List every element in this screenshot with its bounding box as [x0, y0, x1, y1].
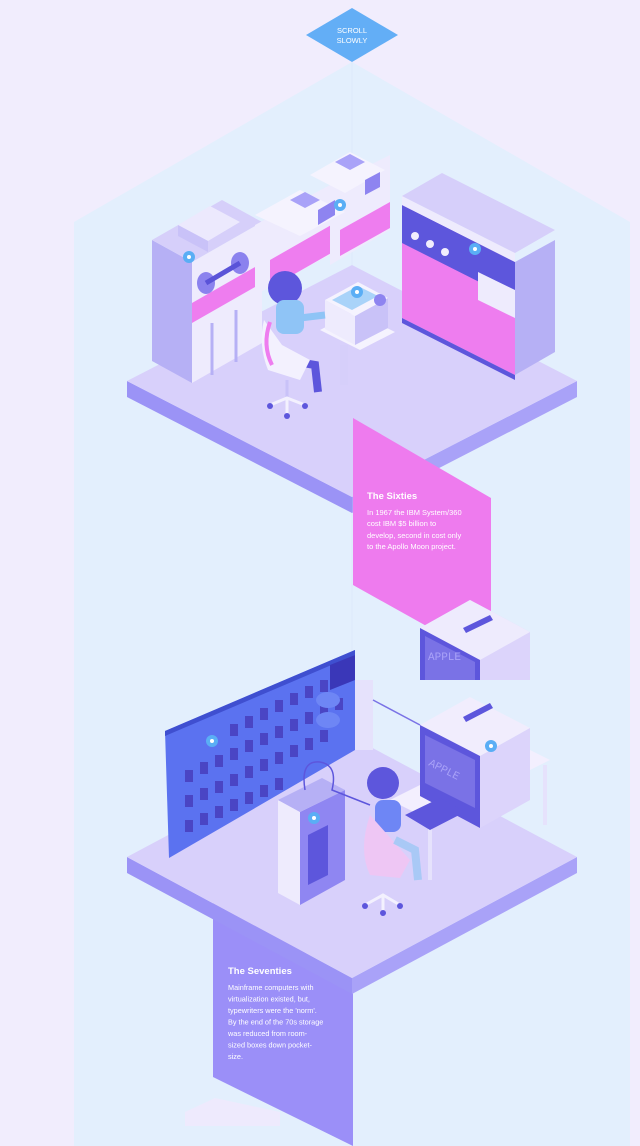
callout: the sixties	[353, 418, 491, 628]
callout: the sixties: to the Apollo Moon project.	[367, 542, 456, 551]
cabinet: tape reel left	[152, 200, 262, 383]
apple computer fragment	[420, 600, 530, 680]
person + chair	[262, 271, 325, 419]
callout: the seventies: By the end of the 70s storage	[228, 1018, 323, 1026]
floor: seventies	[127, 737, 577, 994]
next floor fragment	[185, 1098, 280, 1126]
scroll slowly badge: SCROLL	[337, 26, 367, 35]
cabinets: printers back	[255, 152, 390, 295]
cabinet: right big	[402, 173, 555, 380]
apple computer + desk: APPLE	[426, 758, 461, 784]
walkman	[278, 762, 370, 905]
callout: the seventies: size.	[228, 1052, 243, 1061]
callout: the seventies: typewriters were the 'norm'.	[228, 1006, 317, 1015]
callout: the seventies	[213, 900, 353, 1146]
callout: the sixties: cost IBM $5 billion to	[367, 519, 436, 528]
callout: the seventies: Mainframe computers with	[228, 983, 314, 992]
floor: sixties	[127, 265, 577, 513]
scene: sixties machines	[152, 152, 555, 419]
callout: the seventies: The Seventies	[228, 966, 292, 977]
circuit board	[165, 650, 420, 858]
callout: the seventies: was reduced from room-	[227, 1029, 308, 1038]
markers	[183, 199, 497, 824]
scroll slowly badge: SLOWLY	[337, 36, 367, 45]
callout: the sixties: In 1967 the IBM System/360	[367, 508, 462, 517]
scene: seventies	[165, 650, 550, 916]
callout: the sixties: develop, second in cost only	[367, 531, 461, 540]
person + chair	[362, 767, 418, 916]
callout: the sixties: The Sixties	[367, 491, 417, 502]
scroll slowly badge	[306, 8, 398, 62]
typewriter desk	[320, 282, 395, 385]
callout: the seventies: sized boxes down pocket-	[228, 1040, 313, 1050]
apple computer fragment: APPLE	[428, 652, 461, 664]
callout: the seventies: virtualization existed, but,	[228, 994, 310, 1004]
apple computer + desk	[390, 697, 550, 880]
